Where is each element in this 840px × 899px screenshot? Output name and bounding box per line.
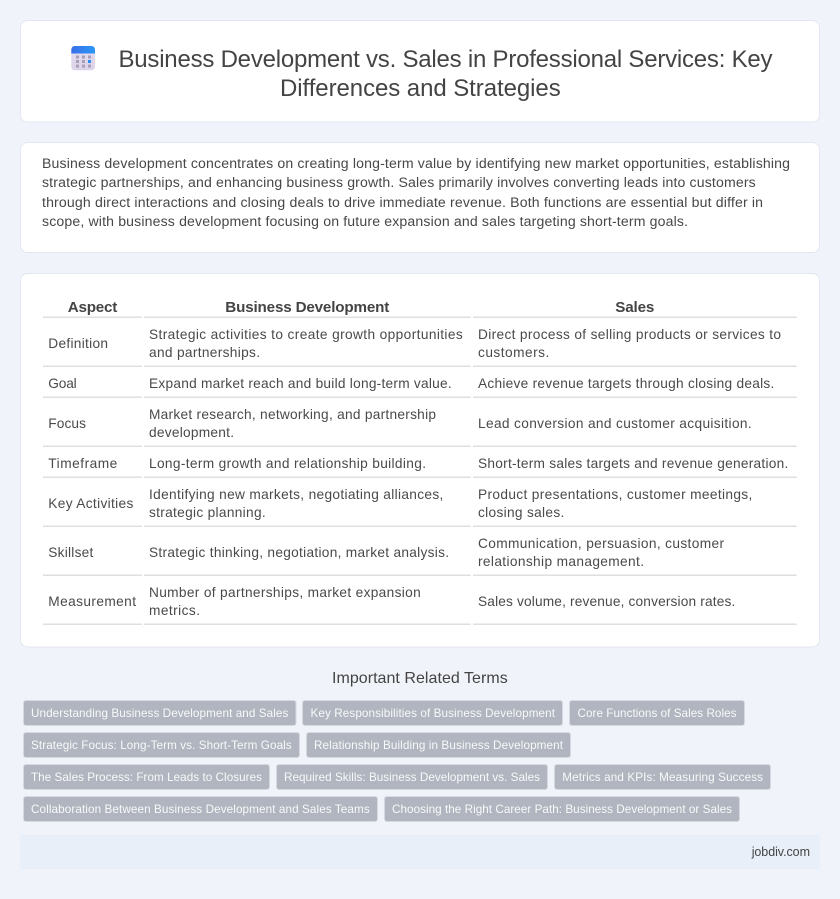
tag list: related terms: [24, 700, 770, 822]
tag: [570, 700, 744, 726]
row: focus: Focus: [48, 416, 86, 431]
tag: Required Skills: Business Development vs. Sales: [284, 771, 540, 784]
row: focus: [48, 407, 752, 440]
tag: [24, 700, 296, 726]
row: definition: Definition: [48, 336, 108, 351]
row: focus: Market research, networking, and partnership: [149, 407, 436, 422]
tag: [302, 700, 562, 726]
panel: intro paragraph: [20, 142, 820, 252]
tag: [276, 764, 548, 790]
row: skillset: Communication, persuasion, customer: [478, 536, 724, 551]
tag: Core Functions of Sales Roles: [578, 707, 737, 720]
tag: Key Responsibilities of Business Development: [310, 707, 556, 720]
tag: Metrics and KPIs: Measuring Success: [562, 771, 763, 784]
row: skillset: [48, 536, 724, 569]
table header row: [68, 299, 654, 316]
row: timeframe: [48, 456, 788, 471]
tag: [306, 732, 570, 758]
row: timeframe: Long-term growth and relationship building.: [149, 456, 426, 471]
tag: Choosing the Right Career Path: Business Development or Sales: [392, 803, 732, 816]
row: goal: [48, 376, 774, 391]
row: key activities: closing sales.: [478, 505, 564, 520]
row: timeframe: Short-term sales targets and revenue generation.: [478, 456, 788, 471]
row: skillset: Skillset: [48, 545, 93, 560]
row: timeframe: Timeframe: [48, 456, 117, 471]
row: definition: Direct process of selling products or services to: [478, 327, 781, 342]
row: measurement: Number of partnerships, market expansion: [149, 585, 421, 600]
tag: [24, 796, 378, 822]
tag: The Sales Process: From Leads to Closures: [31, 771, 262, 784]
text block: summary: strategic partnerships, and enhancing business growth. Sales primarily involves converting leads into customers: [42, 174, 756, 190]
row: measurement: [48, 585, 735, 618]
panel: title header: [20, 20, 820, 122]
row: definition: [48, 327, 781, 360]
row: skillset: relationship management.: [478, 554, 644, 569]
row: measurement: metrics.: [149, 603, 200, 618]
row: definition: and partnerships.: [149, 345, 260, 360]
tag: [24, 732, 300, 758]
tag: Understanding Business Development and Sales: [31, 707, 288, 720]
text block: summary: through direct interactions and closing deals to drive immediate revenue. Both functions are essential but differ in: [42, 194, 763, 210]
tag: Relationship Building in Business Development: [314, 739, 564, 752]
row: focus: Lead conversion and customer acquisition.: [478, 416, 752, 431]
table header row: Sales: [615, 299, 654, 316]
tag: [24, 764, 270, 790]
row: key activities: Identifying new markets, negotiating alliances,: [149, 487, 443, 502]
text block: summary: Business development concentrates on creating long-term value by identifying new market opportunities, establishing: [42, 155, 790, 171]
title: Differences and Strategies: [280, 75, 561, 102]
tag: [384, 796, 740, 822]
tag: Collaboration Between Business Development and Sales Teams: [31, 803, 370, 816]
row: definition: customers.: [478, 345, 549, 360]
panel: comparison table: [20, 274, 820, 647]
row: skillset: Strategic thinking, negotiation, market analysis.: [149, 545, 449, 560]
row: measurement: Sales volume, revenue, conversion rates.: [478, 594, 735, 609]
row: key activities: Product presentations, customer meetings,: [478, 487, 752, 502]
row: measurement: Measurement: [48, 594, 136, 609]
text block: summary: [42, 155, 790, 229]
tag: [554, 764, 770, 790]
row: definition: Strategic activities to create growth opportunities: [149, 327, 463, 342]
row: goal: Goal: [48, 376, 77, 391]
row: key activities: [48, 487, 752, 520]
title: Business Development vs. Sales in Professional Services: Key: [118, 46, 772, 73]
footer: site name: jobdiv.com: [751, 845, 810, 859]
row: goal: Expand market reach and build long-term value.: [149, 376, 452, 391]
row: key activities: strategic planning.: [149, 505, 266, 520]
footer bar: [20, 835, 820, 869]
row: key activities: Key Activities: [48, 496, 133, 511]
row: focus: development.: [149, 425, 234, 440]
table header row: Aspect: [68, 299, 117, 316]
text block: summary: scope, with business development focusing on future expansion and sales targeting short-term goals.: [42, 213, 688, 229]
table header row: Business Development: [225, 299, 389, 316]
row: goal: Achieve revenue targets through closing deals.: [478, 376, 774, 391]
heading: important related terms: Important Related Terms: [332, 670, 508, 687]
icon: calendar: [71, 46, 95, 70]
tag: Strategic Focus: Long-Term vs. Short-Term Goals: [31, 739, 292, 752]
title: [118, 46, 772, 102]
